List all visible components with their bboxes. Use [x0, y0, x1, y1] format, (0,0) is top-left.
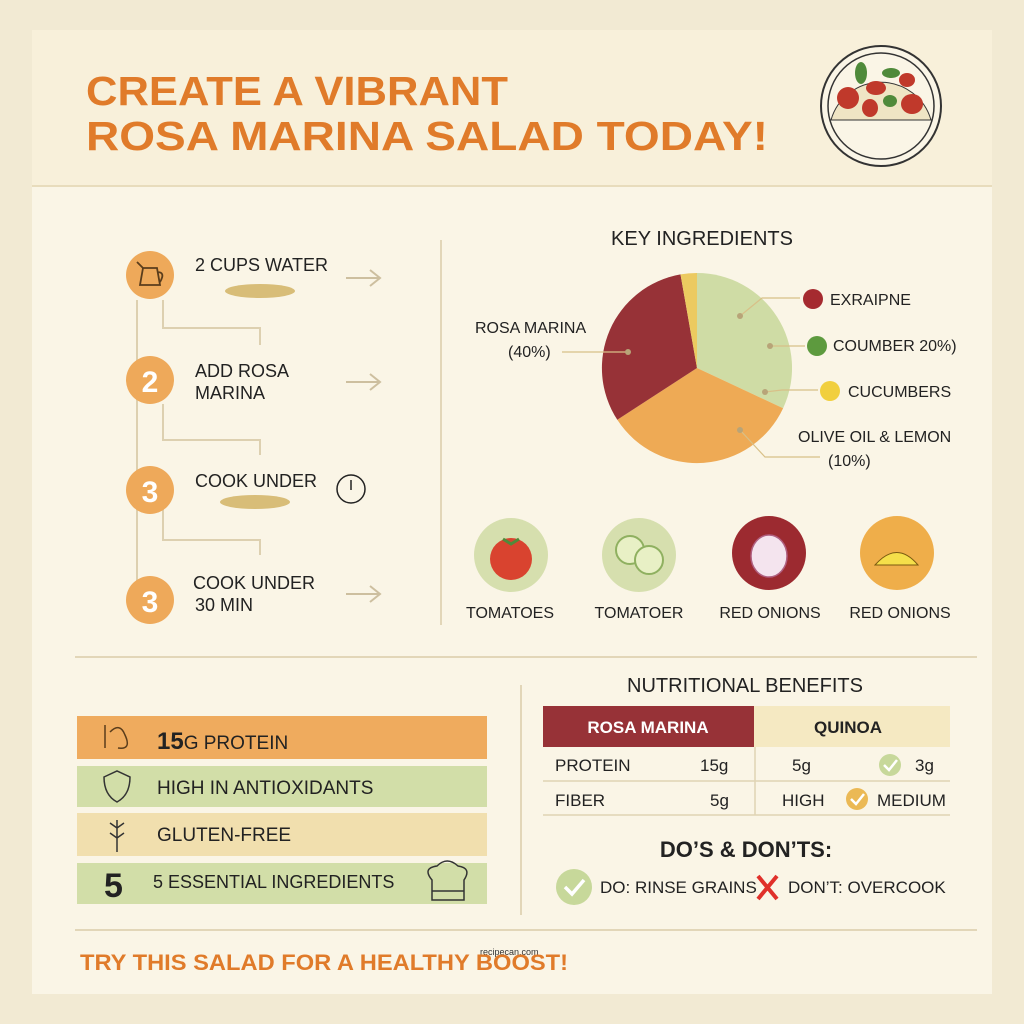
- pie chart: key ingredients: COUMBER 20%): [833, 338, 957, 355]
- step 1: 2 CUPS WATER: [195, 255, 328, 275]
- bar: antioxidants: HIGH IN ANTIOXIDANTS: [157, 778, 373, 799]
- step 3: COOK UNDER: [195, 471, 317, 491]
- ingredient icons: [466, 516, 951, 622]
- nutrition table: FIBER: [555, 791, 605, 810]
- steps timeline: [126, 251, 380, 624]
- do's and don'ts: DO’S & DON’TS:: [660, 837, 832, 862]
- nutrition table: QUINOA: [814, 718, 882, 737]
- bar: protein: 15G PROTEIN: [157, 728, 288, 755]
- step 1: [126, 251, 380, 299]
- title: CREATE A VIBRANT: [86, 68, 508, 114]
- lemon: [849, 516, 951, 622]
- bar: gluten: GLUTEN-FREE: [157, 825, 291, 846]
- step 4: 30 MIN: [195, 595, 253, 615]
- icon: salad bowl: [821, 46, 941, 166]
- tomatoes: TOMATOES: [466, 605, 554, 622]
- footer: TRY THIS SALAD FOR A HEALTHY BOOST!: [80, 950, 568, 975]
- step 2: ADD ROSA: [195, 361, 289, 381]
- nutrition table: 5g: [710, 791, 729, 810]
- do's and don'ts: DON’T: OVERCOOK: [788, 878, 946, 897]
- nutrition table: ROSA MARINA: [587, 718, 709, 737]
- pie chart: key ingredients: ROSA MARINA: [475, 320, 586, 337]
- onion: RED ONIONS: [719, 605, 821, 622]
- step 4: COOK UNDER: [193, 573, 315, 593]
- title: ROSA MARINA SALAD TODAY!: [86, 113, 768, 159]
- pie chart: key ingredients: KEY INGREDIENTS: [611, 228, 793, 250]
- do's and don'ts: [556, 837, 946, 905]
- onion: [719, 516, 821, 622]
- nutrition table: NUTRITIONAL BENEFITS: [627, 675, 863, 697]
- pie chart: key ingredients: (40%): [508, 344, 551, 361]
- nutrition table: 15g: [700, 756, 728, 775]
- cucumber: TOMATOER: [595, 605, 683, 622]
- benefits bars: [77, 716, 487, 905]
- pie chart: key ingredients: [475, 228, 957, 470]
- nutrition table: 5g: [792, 756, 811, 775]
- bar: essentials: [77, 861, 487, 905]
- step 2: 2: [142, 366, 158, 399]
- bar: essentials: 5 ESSENTIAL INGREDIENTS: [153, 872, 394, 892]
- pie chart: key ingredients: CUCUMBERS: [848, 384, 951, 401]
- pie chart: key ingredients: (10%): [828, 453, 871, 470]
- step 3: 3: [142, 476, 158, 509]
- step 2: MARINA: [195, 383, 265, 403]
- cucumber: [595, 518, 683, 622]
- bar: gluten: [77, 813, 487, 856]
- step 2: [126, 356, 380, 404]
- tomatoes: [466, 518, 554, 622]
- footer: recipecan.com: [480, 947, 539, 957]
- nutrition table: 3g: [915, 756, 934, 775]
- nutrition table: [543, 675, 950, 815]
- nutrition table: HIGH: [782, 791, 824, 810]
- pie chart: key ingredients: OLIVE OIL & LEMON: [798, 429, 951, 446]
- lemon: RED ONIONS: [849, 605, 951, 622]
- nutrition table: PROTEIN: [555, 756, 631, 775]
- bar: protein: [77, 716, 487, 759]
- pie chart: key ingredients: EXRAIPNE: [830, 292, 911, 309]
- do's and don'ts: DO: RINSE GRAINS: [600, 878, 757, 897]
- bar: antioxidants: [77, 766, 487, 807]
- title: [86, 68, 768, 159]
- step 4: 3: [142, 586, 158, 619]
- bar: essentials: 5: [104, 867, 123, 905]
- nutrition table: MEDIUM: [877, 791, 946, 810]
- step 4: [126, 573, 380, 624]
- step 3: [126, 466, 365, 514]
